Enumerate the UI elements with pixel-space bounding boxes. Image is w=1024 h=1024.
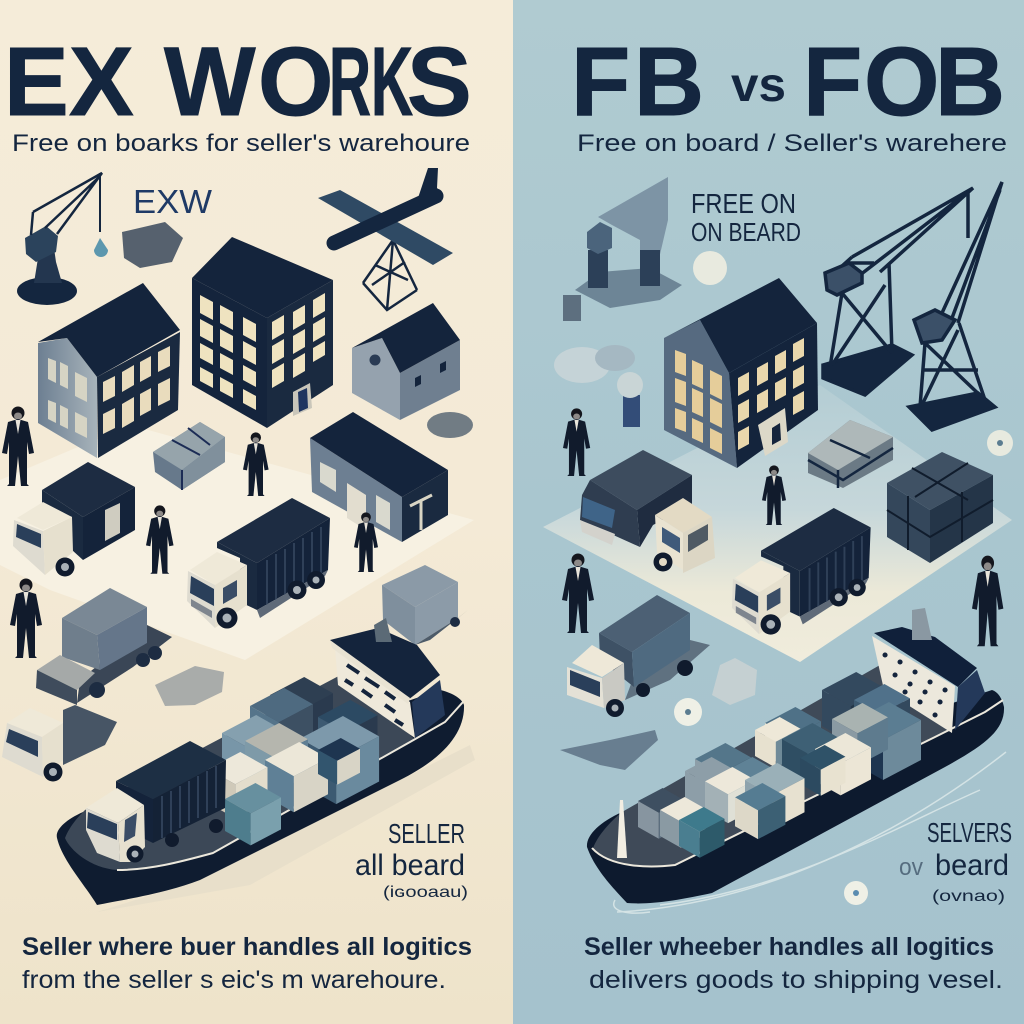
text: left footer: from the seller s eic's m warehoure. [22,966,446,994]
icon: crane faded right [575,177,682,308]
icon: small machine centre [155,666,224,706]
building: low warehouse [310,412,448,542]
text: left footer [22,933,472,994]
icon: crane 1 right [823,188,973,395]
truck centre left [187,498,330,628]
panel: EX Works background [0,0,513,1024]
icon: pallet right [560,730,658,770]
label: EXW: EXW [133,183,213,220]
text: seller all board [355,818,468,901]
title: FB vs FOB [571,27,1005,136]
icon: crane 2 right [909,182,1002,430]
truck right top [580,450,715,573]
title: EX WORKS: EXWO [4,27,333,136]
person [146,505,174,574]
ship right [587,608,1004,903]
title: FB vs FOB: vs [731,59,786,112]
ship left [57,618,464,905]
text: seller all board: (iɢooaau) [383,884,468,901]
title: FB vs FOB: FB [571,27,704,136]
text: seller all board: SELLER [388,818,465,849]
water lines [614,752,1006,913]
truck right lower [567,595,710,717]
icon: cargo box top left [122,222,183,268]
truck right centre [732,508,871,635]
text: seller all board: all beard [355,849,465,882]
label: Free on board: FREE ON [691,188,796,219]
ground plane right [543,385,1012,662]
person [2,406,34,486]
ship shadow left [97,745,475,912]
text: right footer: Seller wheeber handles all logitics [584,933,994,961]
truck lower left [2,705,117,782]
building: right warehouse [664,278,818,468]
title: EX WORKS: S [407,27,472,136]
text: left footer: Seller where buer handles all logitics [22,933,472,961]
icon: stacked crate right [887,452,993,563]
label: Free on board: ON BEARD [691,217,801,247]
decorative dots right [674,251,1013,905]
text: sellers on board: beard [935,849,1009,882]
person [10,578,42,658]
icon: faded machinery right [554,295,643,427]
icon: airplane and tower [318,168,453,310]
person [563,408,590,476]
label: Free on board [691,188,801,247]
icon: bag near truck [712,658,757,705]
person [562,554,594,633]
title: FB vs FOB: FOB [803,27,1005,136]
building: left office tower [192,237,333,428]
subtitle left: Free on boarks for seller's warehoure [12,130,470,157]
person [762,465,786,525]
subtitle right: Free on board / Seller's warehere [577,130,1007,157]
truck with container left [36,588,172,705]
person [243,432,269,496]
text: sellers on board: ov [899,854,923,881]
person [972,556,1003,646]
panel: FOB background [513,0,1024,1024]
title: EX WORKS: RK [329,27,413,136]
icon: small machine [427,412,473,438]
building: left warehouse [38,283,180,458]
building: small house [352,303,460,420]
text: sellers on board: (ovnao) [932,888,1005,905]
icon: container left [382,565,468,645]
icon: parcels left [153,422,225,490]
truck upper left [13,462,135,576]
person [354,512,378,572]
ground plane left [0,425,474,660]
text: right footer [584,933,1003,994]
text: sellers on board [899,817,1012,905]
icon: small crane left [17,173,108,305]
text: right footer: delivers goods to shipping vesel. [589,966,1003,994]
icon: parcels right [808,420,893,488]
